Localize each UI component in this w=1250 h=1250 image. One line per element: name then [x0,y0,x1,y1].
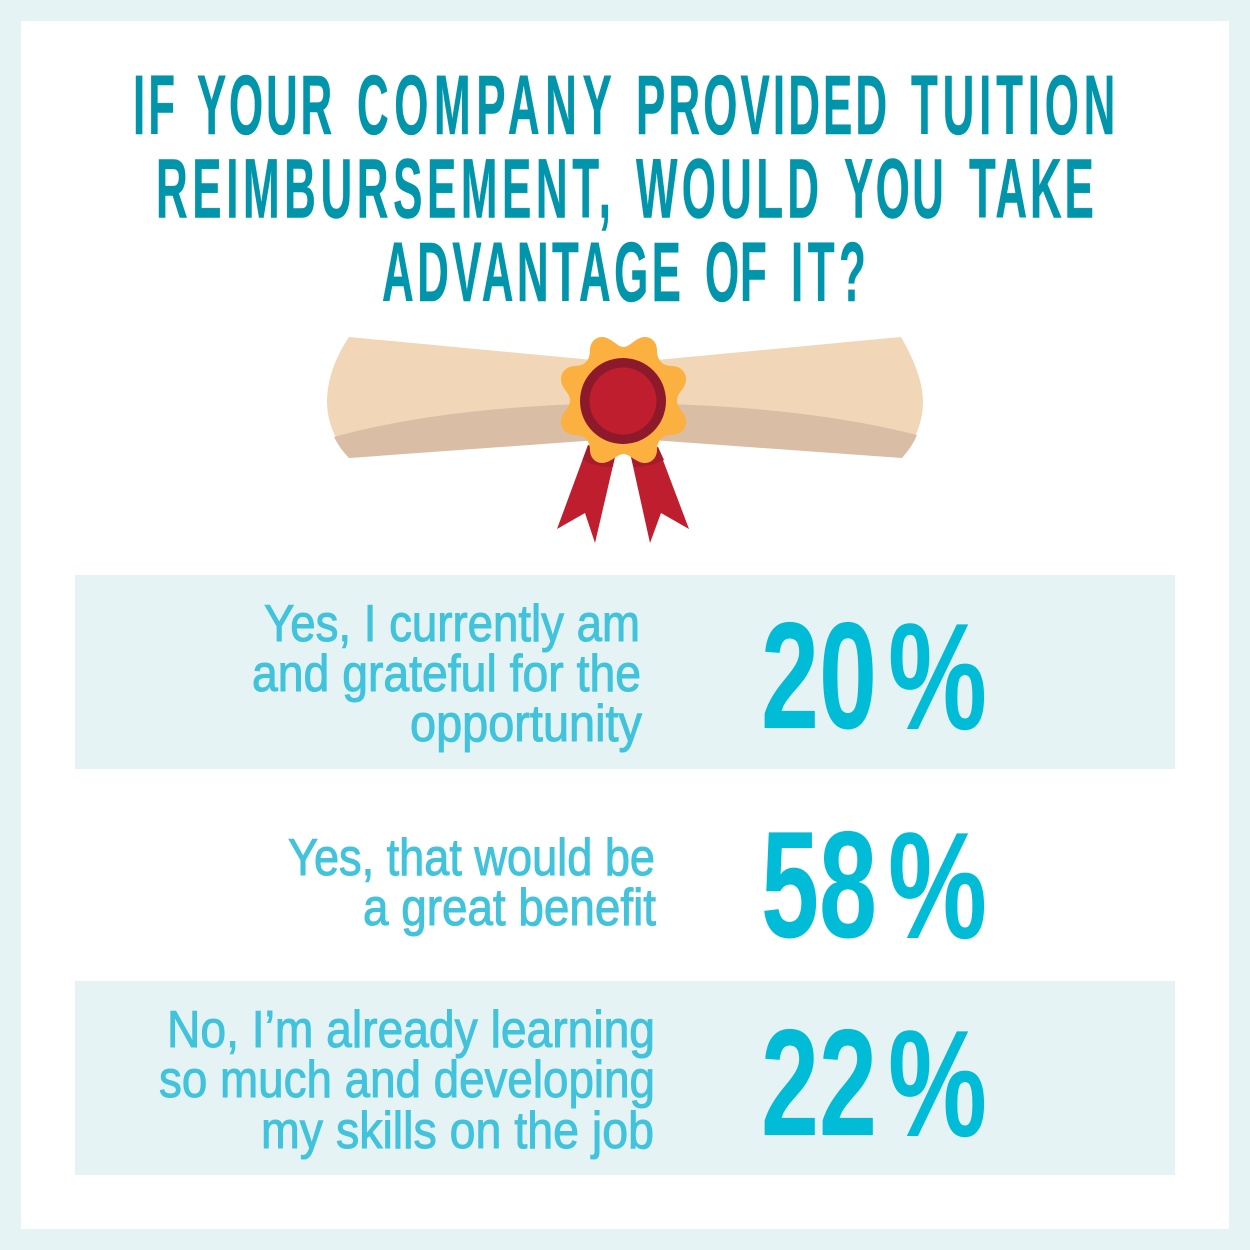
icon: seal [580,358,666,444]
text block: row 1 label: and grateful for the [252,644,641,702]
title: IT? [791,226,866,320]
text block: row 2 label: Yes, that would be [288,828,655,886]
number: 22%: % [888,999,987,1169]
text block: row 1 label: opportunity [410,694,642,752]
title: TUITION [911,59,1115,153]
number: 58%: 58 [761,800,877,970]
panel: row 3 [75,981,1175,1175]
text block: row 3 label: No, I’m already learning [167,1000,655,1058]
text block: row 1 label [252,594,642,752]
text block: row 3 label: my skills on the job [261,1101,654,1159]
icon: ribbon shading [582,445,664,467]
title: YOU [844,142,944,236]
text block: row 3 label: so much and developing [159,1050,655,1108]
number: 22%: 22 [761,998,877,1168]
number: 58%: % [888,801,987,971]
text block: row 1 label: Yes, I currently am [264,594,640,652]
icon: scroll paper [327,337,923,458]
icon: ribbon left [557,445,615,543]
text block: row 3 label [159,1000,655,1159]
number: 20%: 20 [761,591,877,761]
panel: row 1 [75,575,1175,769]
text block: row 2 label [288,828,656,936]
icon: diploma scroll with rosette [327,337,923,543]
icon: rosette [561,337,686,463]
icon: ribbon right [631,447,689,543]
icon: scroll shadow [334,403,917,458]
title: PROVIDED [636,59,887,153]
title: WOULD [636,142,819,236]
title: OF [705,226,767,320]
title: TAKE [969,142,1094,236]
text block: row 2 label: a great benefit [363,878,656,936]
title: COMPANY [357,59,612,153]
title: REIMBURSEMENT, [156,142,611,236]
title: YOUR [197,59,332,153]
number: 20%: % [888,592,987,762]
title: IF [133,59,175,153]
title: ADVANTAGE [382,226,681,320]
panel: row 2 [288,800,987,971]
title [133,59,1115,320]
